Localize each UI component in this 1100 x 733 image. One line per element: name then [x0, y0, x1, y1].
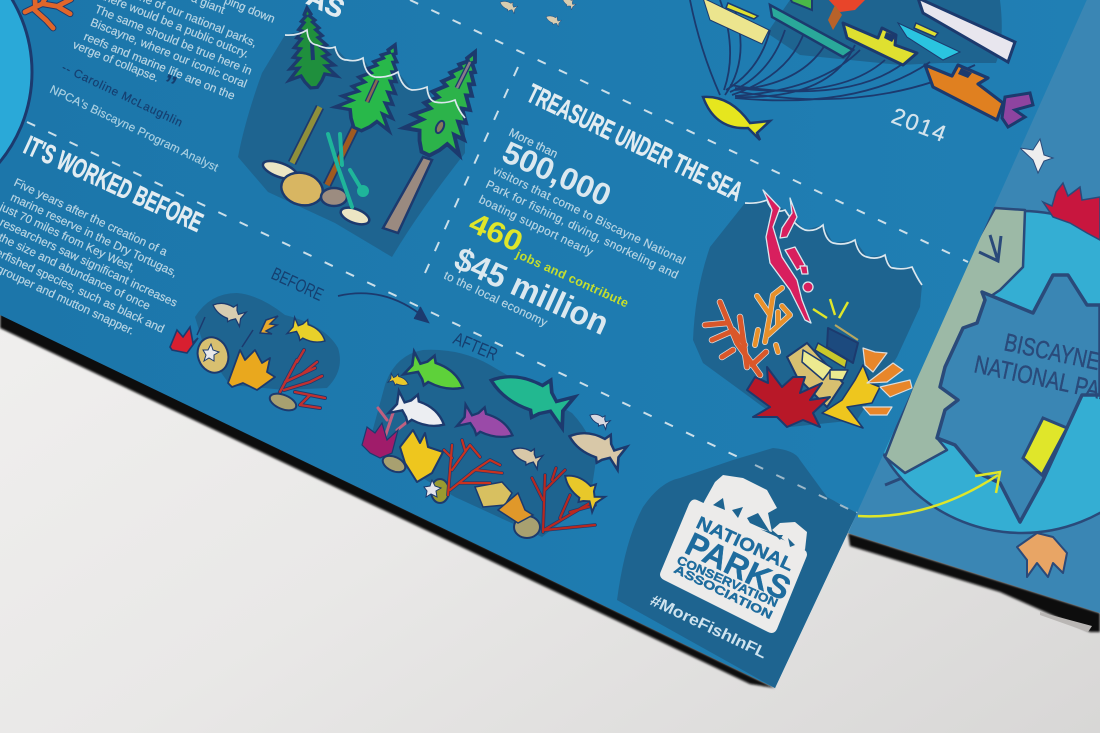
red branch coral: [280, 350, 325, 408]
map title: [972, 328, 1100, 410]
illustration: boats and net: [690, 0, 1033, 147]
treasure stats: Park for fishing, diving, snorkeling and: [484, 178, 680, 282]
arrow: before to after: [338, 293, 428, 322]
treasure stats: to the local economy: [442, 269, 549, 329]
net lines: [690, 0, 975, 100]
boat: cyan: [898, 23, 960, 60]
park map outline: [937, 275, 1100, 522]
redraw dashes over blob: [755, 465, 857, 513]
logo text: NATIONAL: [693, 512, 797, 575]
boat: teal: [770, 5, 853, 57]
land: [885, 208, 1025, 473]
orange coral: [755, 288, 790, 352]
coast marker: [885, 235, 1001, 485]
rocks: [261, 157, 371, 228]
boat: red: [827, 0, 867, 12]
it's worked before body text: just 70 miles from Key West,: [0, 200, 137, 275]
yellow coral: [400, 430, 443, 482]
boat: white: [918, 0, 1015, 62]
orange-red coral: [705, 302, 766, 375]
quote text block: verge of collapse.: [71, 38, 161, 85]
magenta coral: [362, 423, 398, 458]
illustration: before reef: [170, 293, 340, 414]
logo text: PARKS: [680, 525, 797, 607]
heading: treasure under the sea: TREASURE UNDER THE SEA: [522, 78, 747, 207]
dark water blob: [693, 200, 922, 427]
map circle: [861, 211, 1100, 533]
treasure stats: boating support nearly: [477, 193, 595, 259]
fish group: [209, 296, 330, 350]
icon: small bear: [772, 522, 807, 550]
pink branch coral: [378, 407, 412, 437]
icon: closing quote: ”: [158, 68, 181, 100]
dashed dividers: [27, 0, 968, 513]
attribution: NPCA's Biscayne Program Analyst: [48, 83, 221, 175]
starfish: [424, 480, 441, 497]
figure: orange fisherman: [828, 5, 842, 30]
tan rock with starfish: [193, 333, 233, 377]
icon: tan coral: [1017, 533, 1067, 577]
cabin: yellow: [726, 3, 758, 19]
thin stalks: [197, 317, 253, 347]
quote text block: reefs and marine life are on the: [82, 30, 237, 103]
boat: orange with cabin: [925, 65, 1003, 120]
cabin window orange: [958, 68, 972, 78]
stat: 460: 460: [464, 207, 527, 259]
stat: 500,000: 500,000: [497, 134, 616, 213]
tree 2: [331, 33, 422, 141]
back page shadow: [848, 533, 1100, 632]
red branch coral left: [444, 440, 502, 495]
heading: it's worked before: IT'S WORKED BEFORE: [20, 130, 207, 238]
red coral: [747, 367, 830, 427]
orange coral: [498, 493, 533, 523]
tan rock: [475, 482, 512, 507]
cabin: cyan boat top: [914, 23, 938, 37]
year label: 2014: [888, 102, 950, 147]
quote text block: Biscayne, where our iconic coral: [88, 16, 249, 91]
top-left circle: [0, 0, 32, 214]
treasure chest: [802, 325, 858, 380]
logo text: CONSERVATION: [675, 553, 780, 610]
orange frond: [260, 316, 278, 334]
icon: large bear: [700, 475, 777, 532]
logo panel: [617, 448, 857, 688]
diver: [763, 190, 813, 323]
boat: pale yellow: [703, 0, 769, 44]
it's worked before body text: [0, 176, 179, 338]
treasure stats: More than: [507, 126, 560, 161]
boat: yellow: [843, 23, 917, 65]
boat: green cabin: [790, 0, 812, 10]
red coral: [170, 327, 198, 353]
tan rock: [787, 343, 843, 407]
rocks: [380, 453, 540, 538]
it's worked before body text: Five years after the creation of a: [12, 176, 170, 259]
it's worked before body text: researchers saw significant increases: [0, 216, 179, 310]
under sheet sliver: [1040, 612, 1092, 632]
attribution: -- Caroline McLaughlin: [60, 61, 184, 130]
bear leg gaps: [713, 498, 770, 532]
dark water blob: [195, 293, 340, 390]
sparkle rays: [813, 299, 848, 318]
icon: red coral: [1043, 183, 1100, 240]
icon: starfish: [1020, 139, 1053, 173]
label: before: BEFORE: [268, 263, 327, 305]
small fish top: [498, 0, 577, 27]
quote text block: [71, 0, 277, 103]
fish group: [388, 347, 629, 513]
dark water blob: [767, 0, 1002, 65]
cabin window: [884, 32, 896, 42]
icon: yellow fish: [703, 97, 770, 140]
treasure stats: visitors that come to Biscayne National: [491, 164, 687, 268]
red branch coral right: [532, 468, 595, 532]
illustration: trees under water: [238, 6, 503, 257]
yellow coral: [228, 350, 275, 390]
small bear leg gaps: [775, 535, 795, 547]
illustration: diver and treasure: [693, 190, 922, 428]
arrow: yellow pointer to map: [858, 472, 1000, 516]
quote text block: The same should be true here in: [93, 3, 254, 78]
teal diver figure: [328, 134, 367, 207]
icon: orange coral top-left: [18, 0, 78, 35]
dark water blob: [370, 350, 595, 537]
back brochure page: [848, 0, 1100, 613]
stat: $45 million: $45 million: [449, 240, 615, 342]
treasure stats: [442, 126, 687, 342]
logo text: ASSOCIATION: [672, 562, 775, 622]
dark water blob: [238, 30, 465, 257]
boat motor: [1002, 93, 1033, 127]
hashtag: #MoreFishInFL: [647, 592, 769, 662]
tree 1: [283, 6, 338, 90]
starfish: [203, 344, 219, 361]
logo white badge: [660, 500, 807, 633]
illustration: after reef: [362, 347, 629, 538]
park boundary yellow rectangle: [1023, 418, 1067, 475]
rock: [267, 390, 299, 414]
orange fronds: [863, 348, 912, 415]
tree 3: [398, 38, 503, 167]
dark logo blob: [617, 448, 857, 688]
wave line: [745, 200, 922, 285]
it's worked before body text: marine reserve in the Dry Tortugas,: [8, 191, 179, 280]
tree trunks: [292, 107, 432, 233]
wave line: [285, 30, 465, 118]
front page shadow: [0, 312, 775, 688]
yellow coral: [822, 365, 880, 428]
label: after: AFTER: [450, 328, 501, 365]
treasure stats: jobs and contribute: [513, 247, 631, 310]
